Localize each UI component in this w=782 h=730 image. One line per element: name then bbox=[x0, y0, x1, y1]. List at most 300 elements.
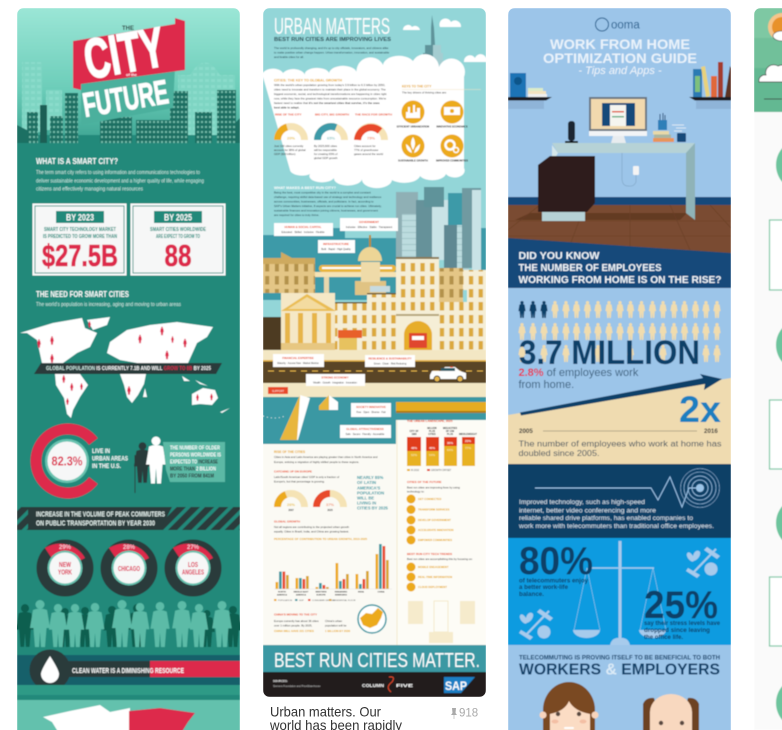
band: clean water bbox=[17, 649, 240, 686]
callout: latin america: OF LATIN bbox=[357, 480, 376, 485]
section: urban landscape stacked bars: CITIES bbox=[428, 434, 436, 436]
gauges: catching up bbox=[278, 494, 344, 512]
callout: latin america: POPULATION bbox=[357, 490, 384, 495]
section: urban landscape stacked bars: CITY OF bbox=[409, 431, 419, 433]
text block: growth paragraph: With the world's urban population growing from today's 3.9 billion to 6.3 billion by 2050, bbox=[274, 83, 385, 87]
text block: definition: The term smart city refers to using information and communications technologies to bbox=[36, 170, 200, 176]
heading: the need for smart cities: THE NEED FOR SMART CITIES bbox=[36, 289, 129, 299]
section: china: China's urban bbox=[325, 619, 343, 623]
text block: growth paragraph: now, while they face the greatest risks from unsustainable resource consumption. We're bbox=[274, 96, 387, 100]
desk bbox=[552, 143, 695, 220]
icon: computer monitor bbox=[589, 97, 647, 143]
illustration: man bbox=[643, 694, 699, 730]
bar chart: contribution: REMAINING bbox=[335, 590, 348, 594]
text block: intro: The world is profoundly changing, and it's up to city officials, innovators, and citizens alike bbox=[274, 46, 389, 50]
gauge: big city big growth: 65% bbox=[327, 136, 335, 140]
section: china: Europe currently has about 36 cities bbox=[274, 619, 319, 623]
banner: global population: GLOBAL POPULATION IS CURRENTLY 7.1B AND WILL GROW TO 8B BY 2025 bbox=[46, 366, 211, 372]
teal band with tents bbox=[263, 395, 486, 444]
section: urban landscape stacked bars bbox=[407, 419, 478, 472]
title: WORK FROM HOME bbox=[550, 37, 690, 52]
gauge: the race for growth bbox=[354, 112, 392, 156]
panel: work from home infographic bbox=[508, 8, 731, 730]
gauge: the race for growth: gases around the world bbox=[354, 152, 384, 156]
banner: peak commuters bbox=[17, 507, 240, 530]
donut: chicago: CHICAGO bbox=[118, 566, 140, 573]
donut: 82.3% urban: 82.3% bbox=[52, 454, 83, 468]
text block: growth paragraph: biggest economic, social, and technological transformations are happening in cities right bbox=[274, 92, 387, 96]
capitol dome bbox=[355, 235, 386, 295]
cream angled section bbox=[508, 378, 731, 464]
heading: what makes a best run city: WHAT MAKES A BEST RUN CITY? bbox=[274, 186, 337, 190]
heading: what is a smart city: WHAT IS A SMART CITY? bbox=[36, 156, 118, 166]
section: global growth: GLOBAL GROWTH bbox=[274, 520, 300, 524]
stat card: by 2023: BY 2023 bbox=[66, 212, 94, 222]
title banner: city: THE bbox=[122, 26, 134, 32]
world map with population figures bbox=[20, 317, 230, 418]
icons: heart dumbbell brain top right bbox=[686, 547, 720, 578]
section: cities of the future list: ACCELERATE INNOVATION bbox=[418, 528, 453, 532]
gauges: catching up: 2007 bbox=[288, 509, 294, 512]
text block: 25% stress: dropped since leaving bbox=[644, 628, 710, 634]
donut: chicago: 28% bbox=[123, 545, 136, 551]
gauge: big city big growth: global GDP growth bbox=[314, 156, 338, 160]
clouds top bbox=[403, 18, 486, 62]
text block: best run: are required for cities to truly thrive. bbox=[274, 213, 320, 217]
text block: 2.8% of employees: 2.8% of employees work bbox=[518, 367, 639, 379]
floor bbox=[508, 205, 731, 255]
callout: latin america: NEARLY 85% bbox=[357, 475, 384, 480]
icons: city drivers: IMPROVED COMMUNITIES bbox=[436, 160, 468, 162]
text block: 25% stress: say their stress levels have bbox=[644, 621, 721, 627]
callout: latin america: LIVING IN bbox=[357, 501, 376, 506]
heading: keys to the city: KEYS TO THE CITY bbox=[402, 84, 432, 88]
heading: keys to the city: The key drivers of thriving cities are: bbox=[402, 90, 447, 94]
background skyscrapers bbox=[396, 187, 486, 273]
gauge: rise of the city bbox=[274, 112, 306, 156]
text block: definition: deliver sustainable economic development and a higher quality of life, while engaging bbox=[36, 178, 204, 184]
bank building bbox=[281, 293, 336, 350]
left shelf with books bbox=[508, 73, 552, 109]
stat card: by 2025: BY 2025 bbox=[164, 212, 192, 222]
text block: 25% stress bbox=[644, 621, 721, 641]
donut: new york: NEW bbox=[59, 562, 71, 569]
section: cities of the future list: EMPOWER COMMUNITIES bbox=[418, 538, 452, 542]
heading: did you know: DID YOU KNOW bbox=[518, 250, 600, 262]
header sky background bbox=[17, 8, 240, 143]
text block: intro: and livable cities for all. bbox=[274, 55, 304, 59]
bar chart: contribution: EUROPE bbox=[316, 594, 326, 596]
section: rise of the cities: RISE OF THE CITIES bbox=[274, 450, 305, 454]
gauge: rise of the city: GDP ($30 trillion) bbox=[274, 152, 295, 156]
heading: cities key to growth: CITIES: THE KEY TO GLOBAL GROWTH bbox=[274, 78, 342, 82]
outlet and cable bbox=[622, 153, 639, 186]
text block: live in urban areas: LIVE IN bbox=[92, 448, 110, 455]
outlined boxes bbox=[770, 220, 782, 646]
dark technology section bbox=[508, 464, 731, 538]
section: global growth: equally. Cities in Brazil, India, and China are growing fastest. bbox=[274, 530, 349, 534]
section: rise of the cities: Cities in Asia and Latin America are playing greater than cities in North America and bbox=[274, 455, 378, 459]
labels on city: Built · Rapid · High Quality bbox=[321, 248, 351, 251]
gauge: the race for growth: 77% of greenhouse bbox=[354, 148, 379, 152]
bar chart: contribution: INDIA bbox=[358, 590, 364, 594]
label: health innovation bbox=[351, 403, 391, 417]
icons: city drivers bbox=[397, 100, 468, 162]
section: global growth: PERCENTAGE OF CONTRIBUTION TO URBAN GROWTH, 2010-2025 bbox=[274, 537, 367, 541]
labels on city: Maturity · Access Now · Market Metrics bbox=[277, 362, 320, 365]
heading: did you know bbox=[518, 250, 722, 286]
section: best run trends list: REAL-TIME INFORMATION bbox=[418, 575, 452, 579]
text block: growth paragraph: fastest need to realize that it's not the smartest cities that survive, it's the ones bbox=[274, 101, 380, 105]
stat card: by 2025: SMART CITIES WORLDWIDE bbox=[150, 227, 207, 233]
subheading: BEST RUN CITIES ARE IMPROVING LIVES bbox=[274, 37, 391, 43]
gauge: big city big growth bbox=[314, 112, 349, 160]
text block: growth paragraph: best able to adapt. bbox=[274, 106, 300, 110]
bright blue section bbox=[508, 538, 731, 645]
arrow: growth bbox=[520, 374, 722, 416]
labels on city: Wealth · Growth · Integration · Innovation bbox=[313, 382, 358, 384]
stat card: by 2023: SMART CITY TECHNOLOGY MARKET bbox=[44, 227, 116, 233]
text block: live in urban areas: IN THE U.S. bbox=[92, 463, 121, 470]
labels on city: Green · Clean · Risk Reducing bbox=[374, 362, 407, 366]
teal mid city bbox=[263, 228, 396, 300]
text block: definition: citizens and effectively managing natural resources bbox=[36, 186, 143, 192]
section: cities of the future list: DEVELOP GOVERNMENT bbox=[418, 518, 451, 522]
text block: 80% telecommuters bbox=[519, 578, 589, 598]
pin count: 918 bbox=[459, 708, 478, 720]
stat: 2x: 2x bbox=[679, 389, 721, 430]
bar chart: contribution: RESIDENTIAL FLOOR bbox=[333, 599, 356, 602]
illustration: woman bbox=[540, 682, 598, 730]
gauge: rise of the city: RISE OF THE CITY bbox=[275, 112, 302, 116]
labels on city: Inclusive · Effective · Stable · Transparent bbox=[346, 226, 392, 229]
title: OPTIMIZATION GUIDE bbox=[543, 51, 697, 66]
callout: older persons: BY 2050 FROM 841M bbox=[170, 474, 214, 480]
section: urban landscape stacked bars: THE URBAN LANDSCAPE, 2025 bbox=[407, 419, 453, 423]
gauges: catching up: 2025 bbox=[327, 509, 333, 512]
gauge: big city big growth: will be responsible bbox=[314, 148, 337, 152]
lower content background bbox=[263, 444, 396, 645]
red sign bbox=[268, 387, 288, 394]
bar chart: contribution: POPULATION bbox=[278, 599, 292, 602]
donut: 82.3% urban bbox=[36, 429, 93, 493]
faded doorway illustration bbox=[408, 601, 475, 643]
drawer cabinet bbox=[538, 156, 595, 221]
callout: latin america bbox=[357, 475, 389, 511]
banner: peak commuters: INCREASE IN THE VOLUME OF PEAK COMMUTERS bbox=[36, 512, 165, 518]
labels on city: INFRASTRUCTURE bbox=[323, 242, 349, 246]
callout: older persons: PERSONS WORLDWIDE IS bbox=[170, 452, 221, 458]
section: best run trends list bbox=[406, 552, 473, 592]
donut: new york: 29% bbox=[59, 545, 72, 551]
stat: 25%: 25% bbox=[644, 584, 718, 627]
text block: best run: across communities, businesses, officials, and politicians. In fact, according to bbox=[274, 200, 374, 204]
section: rise of the cities: Latin/South American cities' GDP is only a fraction of bbox=[274, 475, 339, 479]
banner: best run cities matter bbox=[263, 645, 486, 672]
section: cities of the future list: CITIES OF THE FUTURE bbox=[407, 480, 442, 484]
text block: definition bbox=[36, 170, 204, 192]
gauge: the race for growth: 75% bbox=[367, 136, 375, 140]
subtitle: - Tips and Apps - bbox=[578, 65, 662, 77]
labels on city: RESILIENCE & SUSTAINABILITY bbox=[368, 356, 412, 360]
labels on city: FINANCIAL EXPERTISE bbox=[282, 356, 314, 360]
donut: chicago bbox=[100, 540, 158, 596]
green circles bbox=[776, 139, 782, 729]
section: cities of the future list: Best run cities are improving lives by using bbox=[407, 486, 460, 490]
panel: urban matters infographic bbox=[262, 8, 486, 697]
section: rise of the cities bbox=[274, 450, 378, 484]
footer: sources and logos: SAP bbox=[445, 679, 467, 693]
text block: technology: internet, better video conferencing and more bbox=[519, 508, 657, 514]
street bbox=[263, 350, 486, 397]
stat card: by 2025: 88 bbox=[164, 238, 192, 273]
section: urban landscape stacked bars: 46% bbox=[429, 446, 435, 450]
section: global growth bbox=[274, 520, 367, 541]
heading: did you know: THE NUMBER OF EMPLOYEES bbox=[518, 262, 662, 274]
section: rise of the cities: Europe's, but that percentage is growing. bbox=[274, 480, 325, 484]
heading: keys to the city bbox=[402, 84, 481, 94]
icons: city drivers: SUSTAINABLE GROWTH bbox=[398, 160, 428, 162]
text block: growth paragraph bbox=[274, 83, 387, 110]
bar chart: contribution: MIDDLE EAST bbox=[294, 590, 309, 594]
section: best run trends list: CLOUD DEPLOYMENT bbox=[418, 585, 447, 589]
band: teal separator bbox=[17, 685, 240, 695]
panel: cropped fourth infographic bbox=[754, 8, 782, 730]
donut: los angeles: 27% bbox=[187, 545, 200, 551]
background tower bbox=[422, 16, 443, 66]
icons: city drivers: INNOVATIVE ECONOMICS bbox=[436, 126, 468, 128]
panel: the city of the future infographic bbox=[16, 8, 242, 730]
gauge: rise of the city: account for 38% of global bbox=[274, 148, 306, 152]
timeline bbox=[519, 428, 718, 435]
icons: city drivers: EFFICIENT URBANIZATION bbox=[397, 126, 429, 128]
section: china: CHINA WILL HAVE 221 CITIES bbox=[274, 629, 314, 633]
gauge: big city big growth: By 2025,600 cities bbox=[314, 144, 337, 148]
section: urban landscape stacked bars: PLUS bbox=[429, 431, 436, 433]
labels on city: HUMAN & SOCIAL CAPITAL bbox=[284, 225, 322, 229]
callout: older persons: THE NUMBER OF OLDER bbox=[170, 446, 220, 452]
text block: technology: reliable shared drive platforms, has enabled companies to bbox=[519, 515, 694, 522]
dark skyline bbox=[17, 90, 240, 143]
gauge: rise of the city: Just 100 cities currently bbox=[274, 144, 304, 148]
section: urban landscape stacked bars: 48% bbox=[411, 446, 417, 450]
text block: technology bbox=[518, 499, 714, 530]
title banner: city: of the bbox=[126, 72, 138, 77]
label: global attractiveness bbox=[340, 425, 391, 438]
section: urban landscape stacked bars: 1990 bbox=[411, 434, 417, 436]
section: urban landscape stacked bars: 52% bbox=[411, 453, 417, 457]
bar chart: contribution: CONSUMER DEMAND bbox=[312, 599, 335, 602]
section: china: population will be bbox=[325, 624, 347, 628]
section: global growth: Not all regions are contributing to the projected urban growth bbox=[274, 525, 350, 529]
section: urban landscape stacked bars: 77% bbox=[465, 446, 471, 450]
section: cities of the future list: TRANSFORM SERVICES bbox=[418, 508, 450, 512]
text block: intro: to make positive urban change happen. Urban transformation, innovation, and sustainable bbox=[274, 50, 390, 54]
logo: ooma bbox=[596, 18, 640, 32]
section: best run trends list: BEST RUN CITY TECH TRENDS bbox=[407, 552, 452, 556]
heading: urban matters: URBAN MATTERS bbox=[274, 13, 390, 39]
bar chart: contribution: WESTERN bbox=[316, 592, 327, 594]
donut: los angeles: LOS bbox=[188, 562, 198, 569]
icon: car bbox=[430, 366, 466, 382]
icon: balance scale bbox=[573, 541, 666, 645]
lower map panel bbox=[17, 700, 240, 730]
text block: doubled: The number of employees who work at home has bbox=[518, 440, 722, 448]
heading: telecommuting: TELECOMMUTING IS PROVING ITSELF TO BE BENEFICIAL TO BOTH bbox=[519, 654, 720, 662]
donut: new york bbox=[36, 540, 94, 596]
bar chart: contribution: EMERGING bbox=[335, 594, 347, 596]
bar chart: contribution: NORTH bbox=[278, 592, 286, 594]
gauges: catching up: 26% bbox=[287, 502, 295, 507]
text block: 25% stress: the office life. bbox=[644, 635, 683, 641]
section: urban landscape stacked bars: IN 2010 bbox=[411, 470, 420, 472]
text block: 80% telecommuters: of telecommuters enjoy bbox=[519, 578, 589, 584]
callout: older persons: MORE THAN 2 BILLION bbox=[170, 466, 216, 472]
footer: sources and logos: COLUMN bbox=[362, 683, 384, 688]
light blue section bbox=[508, 645, 731, 730]
icon: elderly couple bbox=[134, 436, 166, 493]
logo: ooma: ooma bbox=[611, 20, 640, 32]
footer: sources and logos: SOURCES: bbox=[273, 679, 288, 683]
band: clean water: CLEAN WATER IS A DIMINISHING RESOURCE bbox=[72, 668, 184, 675]
title banner: city bbox=[73, 15, 185, 91]
labels on city: GOVERNMENT bbox=[359, 220, 379, 224]
text block: technology: work more with telecommuters than traditional office employees. bbox=[518, 523, 714, 530]
bar chart: contribution: AMERICA bbox=[277, 594, 288, 596]
text block: intro bbox=[274, 46, 390, 59]
title banner: future: FUTURE bbox=[80, 73, 171, 125]
banner: global population bbox=[34, 363, 222, 374]
caption: urban matters bbox=[269, 704, 402, 730]
section: china: over 1 million people. By 2025, bbox=[274, 624, 312, 628]
section: rise of the cities: Europe, enticing a migration of highly skilled people to these regions. bbox=[274, 460, 359, 464]
section: urban landscape stacked bars: MEGACITIES bbox=[443, 427, 458, 430]
callout: older persons bbox=[163, 442, 225, 482]
stat card: by 2025 bbox=[131, 204, 225, 275]
callout: latin america: WILL BE bbox=[357, 496, 374, 500]
callout: latin america: CITIES BY 2025 bbox=[357, 506, 389, 511]
section: urban landscape stacked bars: 36% bbox=[447, 441, 453, 445]
label: global attractiveness: GLOBAL ATTRACTIVENESS bbox=[346, 427, 384, 431]
dark blue angled banner bbox=[508, 238, 731, 288]
bar chart: contribution: GDP bbox=[299, 600, 304, 602]
timeline: 2005 bbox=[519, 428, 533, 435]
title banner: city: CITY bbox=[79, 15, 169, 91]
faded skyline bbox=[22, 62, 235, 135]
desk items: pencils books mug bbox=[653, 113, 686, 142]
text block: 2.8% of employees bbox=[518, 367, 639, 391]
donut: los angeles: ANGELES bbox=[182, 570, 204, 576]
section: best run trends list: MOBILE ENGAGEMENT bbox=[418, 565, 449, 569]
icons: heart dumbbell brain bottom left bbox=[519, 609, 553, 640]
labels on city bbox=[273, 218, 415, 386]
gauge: the race for growth: THE RACE FOR GROWTH bbox=[355, 112, 392, 116]
footer: sources and logos: FIVE bbox=[396, 683, 413, 688]
footer: sources and logos bbox=[263, 672, 486, 697]
labels on city: STRONG ECONOMY bbox=[321, 376, 349, 380]
timeline: 2016 bbox=[704, 428, 718, 435]
text block: best run bbox=[274, 190, 382, 217]
text block: best run: sustainable finances and innovation joining citizens, businesses, and government bbox=[274, 208, 378, 212]
text block: 80% telecommuters: a better work-life bbox=[519, 585, 569, 591]
bar chart: contribution: CHINA bbox=[378, 590, 385, 594]
section: urban landscape stacked bars: 54% bbox=[429, 453, 435, 457]
heading: did you know: WORKING FROM HOME IS ON THE RISE? bbox=[518, 274, 722, 286]
section: cities of the future list bbox=[406, 480, 460, 544]
green header bbox=[754, 8, 782, 112]
section: cities of the future list: technology to: bbox=[407, 490, 425, 494]
heading: workers and employers: WORKERS & EMPLOYERS bbox=[519, 662, 720, 678]
stat card: by 2023 bbox=[33, 204, 126, 275]
section: urban landscape stacked bars: PLUS bbox=[447, 434, 454, 436]
section: cities of the future list: GET CONNECTED bbox=[418, 497, 441, 501]
caption: urban matters: Urban matters. Our bbox=[270, 704, 381, 720]
text block: live in urban areas: URBAN AREAS bbox=[92, 456, 128, 462]
text block: technology: Improved technology, such as high-speed bbox=[519, 499, 646, 506]
gauge: rise of the city: 20% bbox=[287, 136, 295, 140]
lower right background bbox=[396, 420, 486, 645]
labels on city: Educated · Skilled · Inclusive · Flexible bbox=[282, 231, 325, 234]
gauge: the race for growth: Cities account for bbox=[354, 144, 376, 148]
banner: peak commuters: ON PUBLIC TRANSPORTATION BY YEAR 2030 bbox=[36, 520, 155, 528]
section: urban landscape stacked bars: OF 10M bbox=[446, 431, 454, 433]
text block: growth paragraph: cities need to innovate and transform to maintain their place in the global economy. The bbox=[274, 88, 386, 92]
section: urban landscape stacked bars: MIDDLEWEIGHT bbox=[459, 434, 478, 436]
stat: 3.7 million: 3.7 MILLION bbox=[519, 334, 700, 372]
text block: best run: Being the best, most competitive city in the world is a complex and constant bbox=[274, 190, 371, 194]
icon: phone bbox=[565, 121, 578, 143]
red sign: SUPPORT bbox=[272, 390, 284, 393]
banner: best run cities matter: BEST RUN CITIES MATTER. bbox=[274, 650, 480, 672]
baseboard bbox=[508, 197, 731, 205]
stat card: by 2023: $27.5B bbox=[42, 238, 118, 273]
bar chart: contribution: AMERICA bbox=[296, 594, 307, 596]
title bbox=[543, 37, 697, 66]
section: china: 1 BILLION BY 2030 bbox=[325, 629, 351, 633]
footer: sources and logos: Siemens Foundation and PriceWaterhouse bbox=[273, 685, 321, 688]
city buildings bbox=[263, 252, 486, 350]
stat card: by 2025: ARE EXPECT TO GROW TO bbox=[156, 234, 200, 240]
text block: 2.8% of employees: from home. bbox=[518, 379, 574, 391]
right shelf with books bbox=[689, 62, 731, 109]
gauges: catching up: 37% bbox=[326, 502, 334, 507]
pictogram: people grid bbox=[518, 301, 721, 362]
text block: live in urban areas bbox=[92, 448, 128, 470]
icon: signal wave bbox=[535, 468, 720, 508]
section: urban landscape stacked bars: 23% bbox=[465, 439, 471, 443]
callout: older persons: EXPECTED TO INCREASE bbox=[170, 460, 218, 466]
section: china bbox=[274, 612, 351, 633]
section: urban landscape stacked bars: MILLION bbox=[427, 428, 437, 430]
callout: latin america: AMERICA'S bbox=[357, 485, 381, 490]
stat: 80%: 80% bbox=[519, 540, 593, 583]
section: best run trends list: Best run cities are accomplishing this by focusing on: bbox=[407, 557, 473, 561]
section: china: CHINA'S MOVING TO THE CITY bbox=[274, 612, 317, 616]
donut: los angeles bbox=[164, 540, 222, 596]
gauge: big city big growth: for creating 65% of bbox=[314, 152, 338, 156]
text block: population: The world's population is increasing, aging and moving to urban areas bbox=[36, 302, 181, 308]
gauge: big city big growth: BIG CITY, BIG GROWTH bbox=[315, 112, 349, 116]
text block: doubled: doubled since 2005. bbox=[518, 449, 600, 458]
monorail bbox=[263, 265, 396, 293]
stat card: by 2023: IS PREDICTED TO GROW MORE THAN bbox=[43, 234, 117, 240]
section: urban landscape stacked bars: GROWTH OFFSET bbox=[431, 470, 452, 472]
icon: china map bbox=[358, 605, 386, 633]
text block: best run: challenge, requiring skilful data-based use of strategy and technology and resilience bbox=[274, 195, 382, 199]
cloud section background bbox=[262, 54, 465, 188]
section: urban landscape stacked bars: 64% bbox=[447, 448, 453, 452]
label: health innovation: Free · Open · Diverse · Fair bbox=[356, 411, 386, 414]
